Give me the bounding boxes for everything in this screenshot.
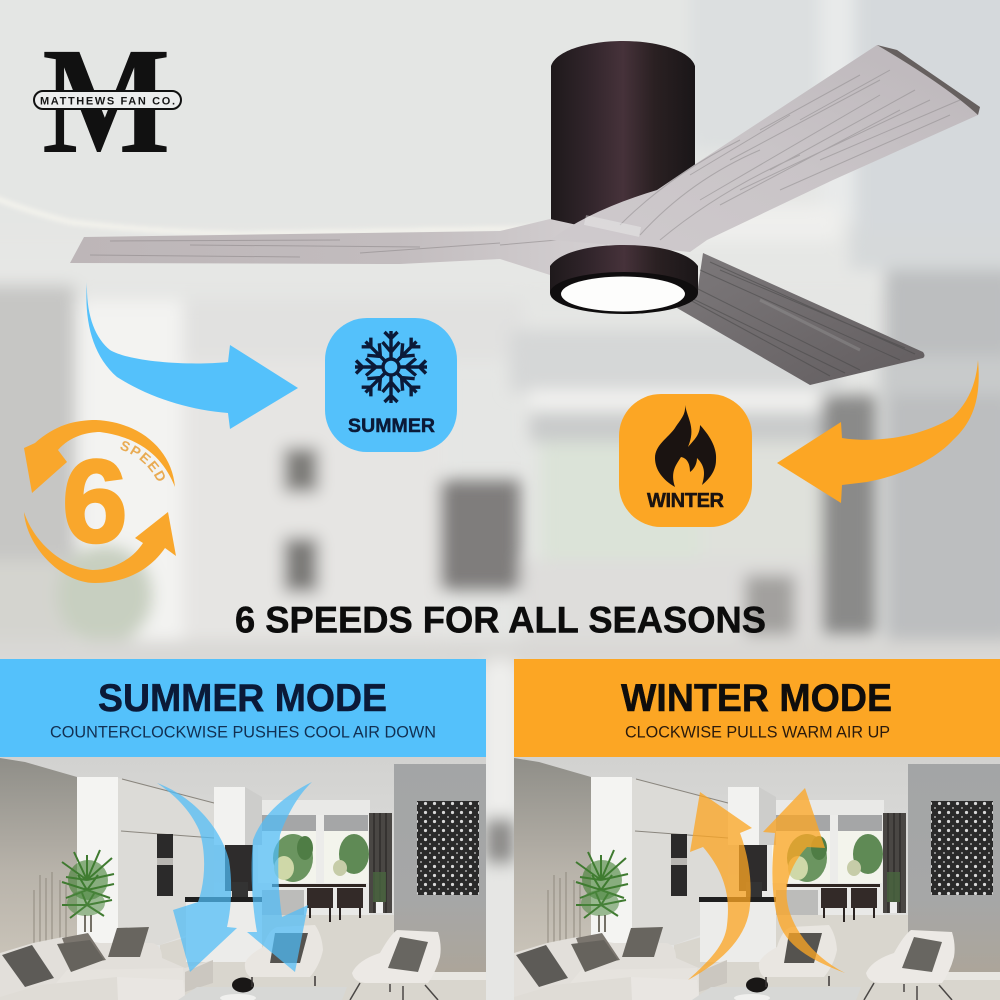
panel: summer mode bbox=[0, 659, 486, 1000]
heading: 6 SPEEDS FOR ALL SEASONS bbox=[235, 600, 766, 640]
arrow: summer blue curve bbox=[86, 282, 298, 429]
top circular arrow bbox=[24, 420, 175, 493]
summer header bar bbox=[0, 659, 486, 757]
right downward arrow bbox=[247, 782, 312, 972]
summer subtitle: COUNTERCLOCKWISE PUSHES COOL AIR DOWN bbox=[50, 724, 436, 742]
winter subtitle: CLOCKWISE PULLS WARM AIR UP bbox=[625, 724, 890, 742]
badge label: WINTER bbox=[647, 490, 725, 512]
badge background bbox=[619, 394, 752, 527]
logo name text: MATTHEWS FAN CO. bbox=[40, 96, 175, 108]
fan canopy bbox=[551, 41, 695, 225]
left upward arrow bbox=[688, 792, 752, 980]
logo serif M: M bbox=[42, 17, 171, 186]
fan lower blade bbox=[677, 253, 924, 385]
logo: Matthews Fan Co. bbox=[34, 17, 181, 186]
arrow: winter orange curve bbox=[777, 360, 979, 503]
badge: summer bbox=[325, 318, 457, 452]
winter room photo bbox=[514, 757, 1000, 1000]
right upward arrow bbox=[763, 788, 845, 973]
icon: 6 speed bbox=[24, 420, 176, 583]
bottom circular arrow bbox=[24, 512, 176, 583]
badge background bbox=[325, 318, 457, 452]
number 6: 6 bbox=[62, 436, 128, 568]
fan light rim bbox=[550, 272, 698, 314]
ceiling fan bbox=[70, 41, 980, 385]
fan light housing bbox=[550, 245, 698, 293]
badge label: SUMMER bbox=[348, 415, 435, 437]
icon: flame bbox=[655, 405, 716, 487]
panel: winter mode bbox=[514, 659, 1000, 1000]
summer airflow arrows bbox=[157, 782, 312, 972]
icon: snowflake bbox=[355, 331, 427, 403]
winter title: WINTER MODE bbox=[621, 677, 892, 720]
fan light bbox=[561, 276, 685, 312]
winter airflow arrows bbox=[688, 788, 845, 980]
summer title: SUMMER MODE bbox=[98, 677, 387, 720]
summer room photo bbox=[0, 757, 486, 1000]
left downward arrow bbox=[157, 783, 237, 972]
speed curved text: SPEED bbox=[120, 441, 165, 481]
winter header bar bbox=[514, 659, 1000, 757]
fan left blade bbox=[70, 219, 610, 275]
badge: winter bbox=[619, 394, 752, 527]
fan upper-right blade bbox=[550, 45, 980, 252]
logo name pill bbox=[34, 91, 181, 109]
